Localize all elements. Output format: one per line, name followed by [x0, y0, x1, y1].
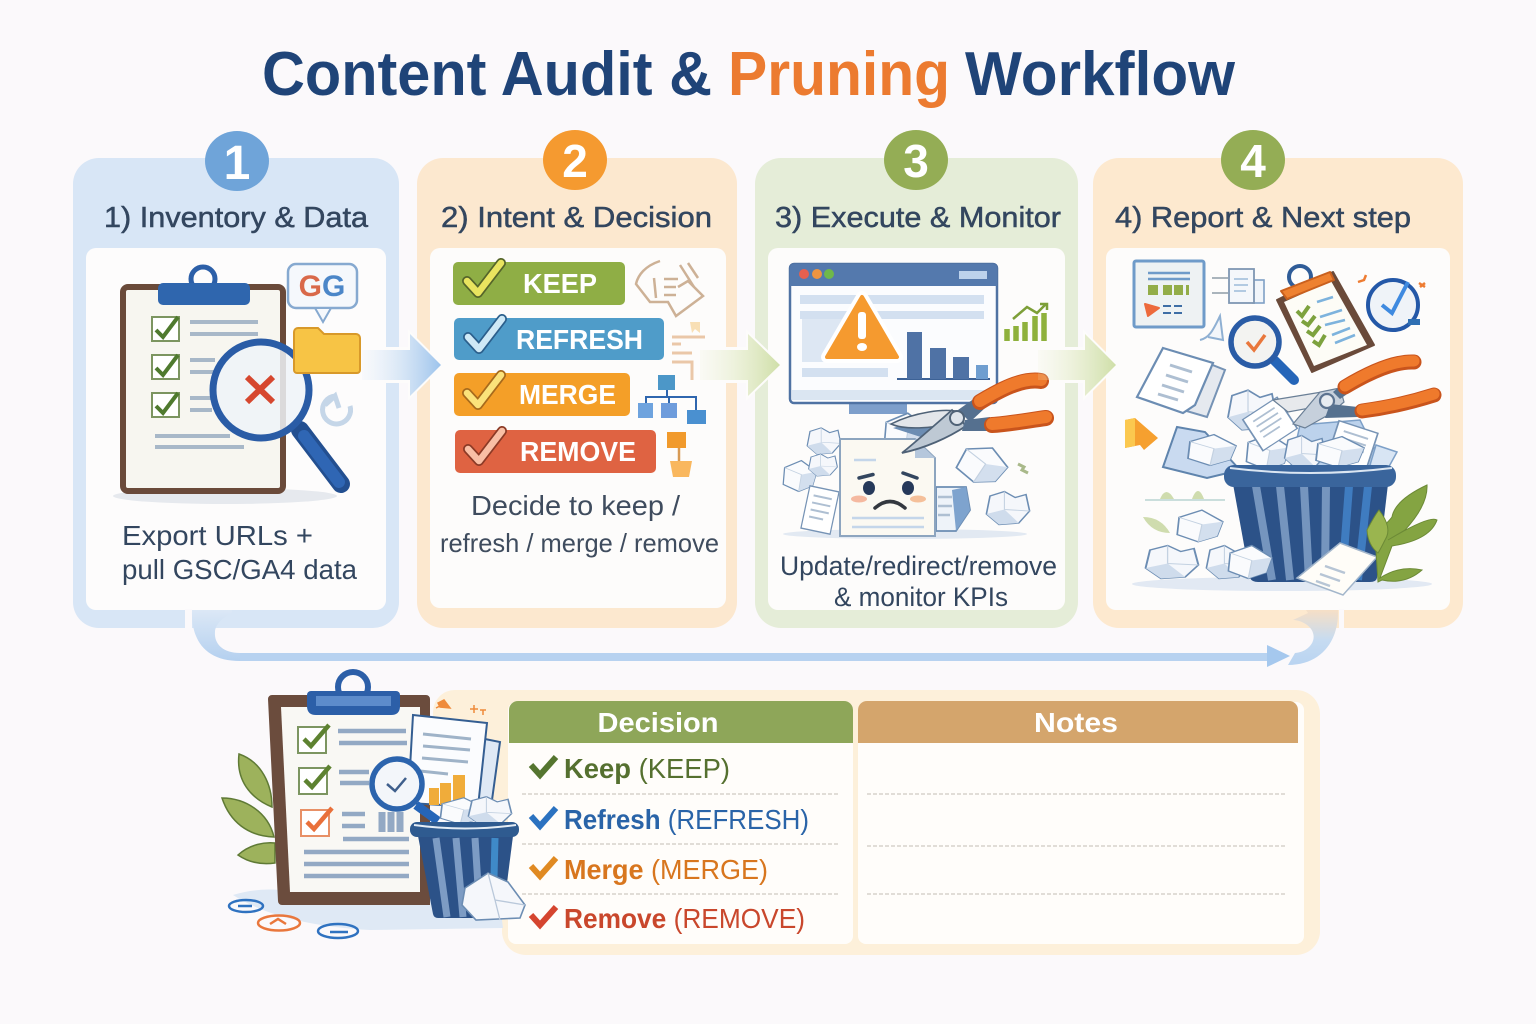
- icon: search console tag and folder: [288, 264, 360, 424]
- row: refresh: Refresh (REFRESH): [564, 804, 809, 835]
- REFRESH button: [454, 318, 664, 360]
- panel: step 1 inventory and data: [73, 131, 399, 628]
- panel: decision table: [433, 690, 1320, 955]
- panel: step 2 intent and decision: [417, 130, 737, 628]
- title: Pruning: [728, 40, 950, 109]
- icon: basket with paper: [410, 797, 525, 920]
- row: remove: Remove (REMOVE): [564, 903, 805, 934]
- icon: paper clips: [229, 900, 358, 938]
- loop connector arrow: [185, 609, 1344, 667]
- step 2 badge: 2: [562, 135, 588, 187]
- icon: small magnifier: [1200, 316, 1294, 380]
- title: Workflow: [965, 40, 1236, 109]
- icon: checklist clipboard: [1277, 266, 1374, 372]
- arrow: step 3 to step 4: [1038, 334, 1116, 396]
- step 1 badge: [205, 131, 269, 191]
- row: merge: Merge (MERGE): [564, 854, 768, 885]
- step 3 description: Update/redirect/remove: [780, 551, 1057, 581]
- icon: orange pruning shears: [891, 380, 1046, 453]
- KEEP button: KEEP: [523, 268, 597, 299]
- icon: merge lines: [672, 322, 705, 380]
- icon: remove bin: [667, 432, 692, 477]
- illustration: clipboard with basket: [222, 672, 525, 938]
- column header: Notes: [858, 701, 1298, 743]
- step 1 badge: 1: [224, 137, 250, 190]
- icon: hierarchy: [638, 375, 706, 424]
- icon: browser with warning and chart: [790, 264, 1047, 414]
- panel: step 3 execute and monitor: [755, 130, 1078, 628]
- title: [262, 40, 1236, 109]
- step 3 description: & monitor KPIs: [834, 582, 1008, 612]
- icon: stopwatch: [1358, 275, 1425, 330]
- REMOVE button: REMOVE: [520, 436, 636, 467]
- icon: sad page with debris: [783, 413, 1030, 539]
- icon: trash basket full of paper: [1132, 390, 1437, 595]
- step 1 heading: 1) Inventory & Data: [104, 202, 369, 234]
- arrow: step 1 to step 2: [362, 334, 441, 396]
- step 3 badge: 3: [903, 135, 929, 187]
- step 4 heading: 4) Report & Next step: [1115, 202, 1411, 234]
- step 3 heading: 3) Execute & Monitor: [775, 202, 1061, 234]
- icon: shears over basket: [1273, 361, 1434, 428]
- MERGE button: [454, 373, 630, 416]
- icon: clipboard with magnifier: [113, 267, 341, 504]
- icon: magnifier: [372, 759, 438, 821]
- MERGE button: MERGE: [519, 379, 616, 410]
- column header: Notes: Notes: [1034, 707, 1118, 738]
- step 2 description: [440, 490, 719, 558]
- icon: search console tag and folder: GG: [299, 270, 345, 303]
- arrow: step 2 to step 3: [700, 334, 780, 396]
- row: keep: Keep (KEEP): [564, 753, 730, 784]
- step 3 badge: [884, 130, 948, 190]
- icon: report sheet: [408, 700, 500, 807]
- REFRESH button: REFRESH: [516, 324, 643, 355]
- step 1 description: pull GSC/GA4 data: [122, 554, 357, 585]
- step 1 description: [122, 520, 357, 585]
- step 4 badge: [1221, 130, 1285, 190]
- step 2 badge: [543, 130, 607, 190]
- icon: report thumbnail: [1134, 261, 1264, 327]
- column header: Decision: Decision: [598, 707, 718, 738]
- step 2 description: refresh / merge / remove: [440, 528, 719, 558]
- KEEP button: [453, 262, 625, 305]
- step 3 description: [780, 551, 1057, 612]
- REMOVE button: [455, 430, 656, 473]
- step 2 heading: 2) Intent & Decision: [441, 202, 712, 234]
- title: Content Audit &: [262, 40, 712, 109]
- step 2 description: Decide to keep /: [471, 490, 680, 521]
- icon: loose documents: [1125, 348, 1225, 450]
- step 1 description: Export URLs +: [122, 520, 313, 551]
- icon: scattered notes: [636, 261, 703, 316]
- step 4 badge: 4: [1240, 135, 1266, 187]
- column header: Decision: [509, 701, 853, 743]
- panel: step 4 report and next step: [1093, 130, 1463, 628]
